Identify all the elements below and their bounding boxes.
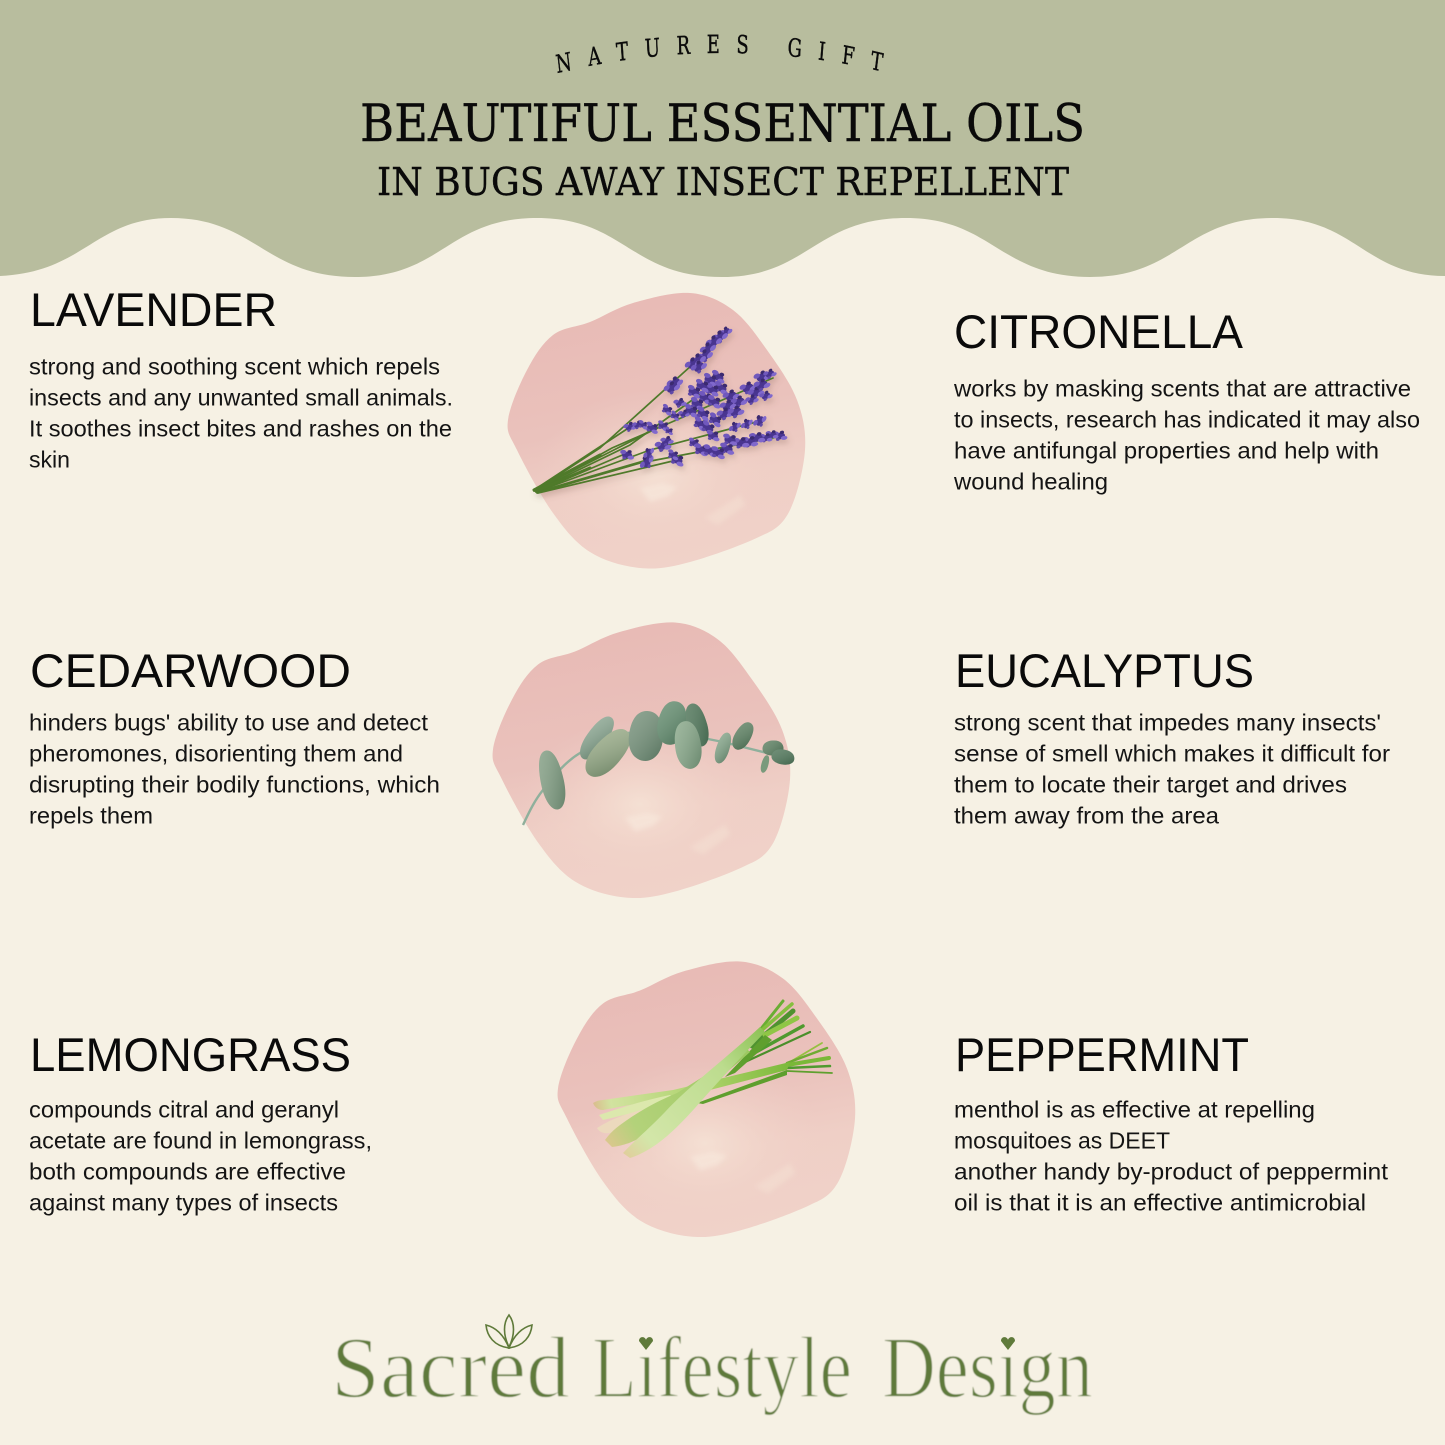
pink blob 1 xyxy=(508,293,805,569)
cedarwood description: repels them xyxy=(29,802,153,828)
cedarwood description: pheromones, disorienting them and xyxy=(29,740,403,766)
lavender flower heads xyxy=(620,324,788,471)
heading: lemongrass: LEMONGRASS xyxy=(30,1028,351,1081)
panel: lemongrass text xyxy=(29,1028,372,1216)
heading: peppermint: PEPPERMINT xyxy=(955,1028,1249,1081)
curved tagline: NATURES GIFT xyxy=(556,34,884,74)
citronella description: works by masking scents that are attractive xyxy=(953,376,1411,402)
logo wordmark: Design xyxy=(882,1320,1093,1417)
cedarwood description xyxy=(29,710,440,828)
pink blob 2 xyxy=(493,622,790,898)
panel: eucalyptus text xyxy=(954,644,1390,828)
panel: cedarwood text xyxy=(29,644,440,828)
peppermint description: another handy by-product of peppermint xyxy=(954,1158,1389,1184)
heading: citronella: CITRONELLA xyxy=(954,305,1244,358)
lavender description: insects and any unwanted small animals. xyxy=(29,384,453,410)
lavender sprig xyxy=(534,324,788,493)
citronella description: wound healing xyxy=(953,468,1108,494)
lemongrass description: compounds citral and geranyl xyxy=(29,1096,339,1122)
pink blob 3 xyxy=(558,961,855,1237)
lemongrass description xyxy=(29,1096,372,1216)
cedarwood description: disrupting their bodily functions, which xyxy=(29,772,440,798)
citronella description: have antifungal properties and help with xyxy=(954,438,1379,464)
eucalyptus branch xyxy=(523,699,796,825)
peppermint description xyxy=(954,1096,1389,1216)
eucalyptus description: sense of smell which makes it difficult for xyxy=(954,740,1390,766)
icon: pink watercolour blob with lemongrass xyxy=(558,961,855,1237)
lavender description: It soothes insect bites and rashes on the xyxy=(29,416,452,442)
panel: citronella text xyxy=(953,305,1420,494)
lavender description: skin xyxy=(29,446,70,472)
eucalyptus description xyxy=(954,710,1390,828)
citronella description xyxy=(953,376,1420,494)
panel: peppermint text xyxy=(954,1028,1389,1216)
eucalyptus stem xyxy=(523,730,787,825)
lemongrass stalks xyxy=(593,1001,832,1158)
logo wordmark xyxy=(331,1320,1093,1417)
heading: cedarwood: CEDARWOOD xyxy=(30,644,351,697)
icon: pink watercolour blob with lavender xyxy=(508,293,805,569)
icon: lotus leaves xyxy=(486,1315,532,1348)
logo wordmark: Lifestyle xyxy=(592,1320,852,1417)
peppermint description: menthol is as effective at repelling xyxy=(954,1096,1315,1122)
eucalyptus description: strong scent that impedes many insects' xyxy=(954,710,1381,736)
heading: lavender: LAVENDER xyxy=(30,283,277,336)
logo wordmark: Sacred xyxy=(331,1320,570,1417)
eucalyptus leaves xyxy=(535,699,796,812)
peppermint description: mosquitoes as DEET xyxy=(954,1128,1170,1154)
peppermint description: oil is that it is an effective antimicrobial xyxy=(954,1190,1366,1216)
eucalyptus description: them away from the area xyxy=(954,802,1219,828)
lemongrass back stalks xyxy=(725,1035,772,1077)
lavender description xyxy=(29,354,453,472)
eucalyptus description: them to locate their target and drives xyxy=(954,772,1347,798)
icon: heart dots xyxy=(639,1337,1015,1350)
icon: pink watercolour blob with eucalyptus xyxy=(493,622,796,898)
heading: eucalyptus: EUCALYPTUS xyxy=(955,644,1254,697)
lemongrass description: both compounds are effective xyxy=(29,1158,346,1184)
header wave band xyxy=(0,0,1445,277)
panel: lavender text xyxy=(29,283,453,472)
lavender stems xyxy=(534,365,783,493)
lemongrass description: against many types of insects xyxy=(29,1190,338,1216)
lemongrass description: acetate are found in lemongrass, xyxy=(29,1128,372,1154)
title block xyxy=(360,34,1085,205)
cedarwood description: hinders bugs' ability to use and detect xyxy=(29,710,429,736)
main title: BEAUTIFUL ESSENTIAL OILS xyxy=(360,95,1085,154)
lavender description: strong and soothing scent which repels xyxy=(29,354,440,380)
subtitle: IN BUGS AWAY INSECT REPELLENT xyxy=(377,160,1069,205)
lemongrass front stalks xyxy=(605,1047,750,1147)
citronella description: to insects, research has indicated it may also xyxy=(954,406,1420,432)
lemongrass green tips xyxy=(745,1001,832,1073)
logo: Sacred Lifestyle Design xyxy=(331,1315,1093,1417)
